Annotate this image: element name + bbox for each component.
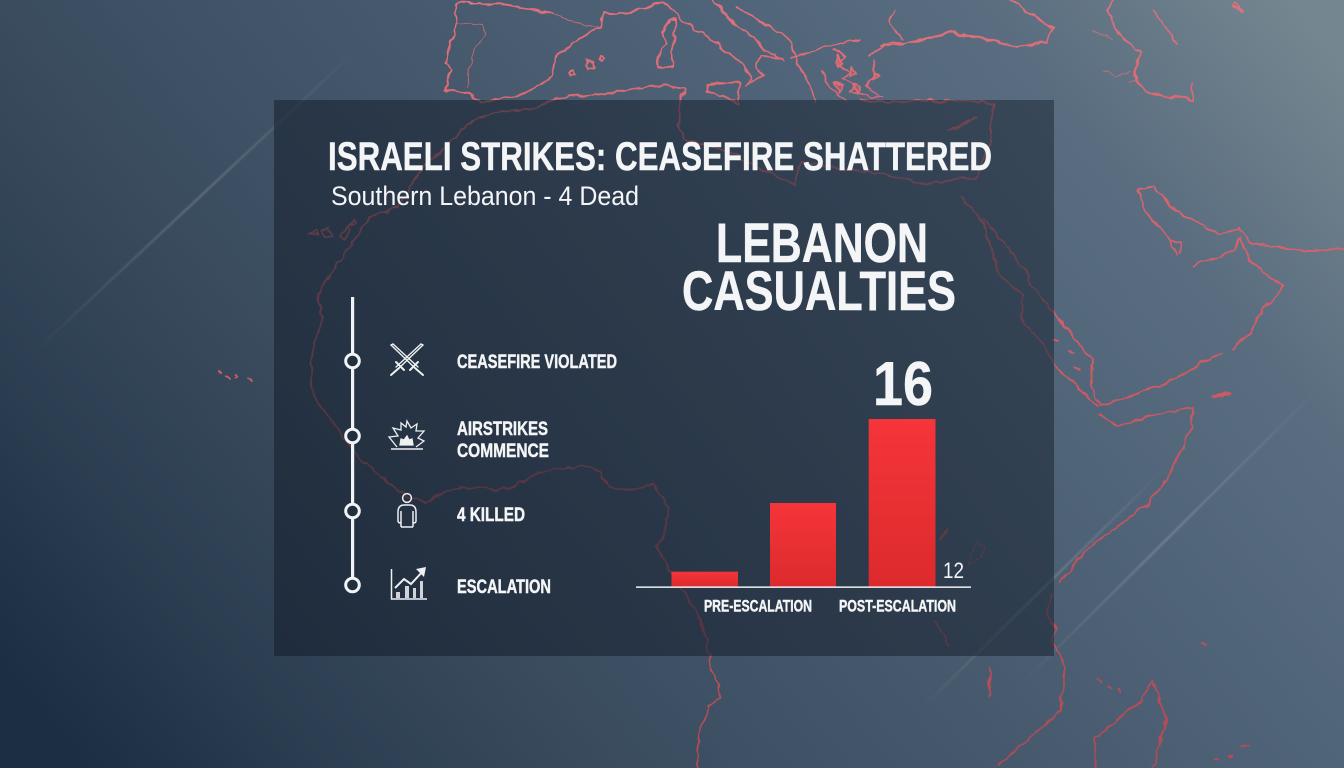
chart heading: CASUALTIES: [682, 259, 956, 322]
bar chart: [636, 350, 971, 616]
chart heading: LEBANON: [716, 211, 928, 274]
icon: person: [398, 494, 416, 527]
bar chart: POST-ESCALATION: [839, 596, 956, 616]
timeline labels: [457, 351, 617, 598]
bar chart: PRE-ESCALATION: [704, 596, 812, 616]
timeline labels: CEASEFIRE VIOLATED: [457, 351, 617, 373]
title: ISRAELI STRIKES: CEASEFIRE SHATTERED: [328, 135, 992, 179]
timeline labels: AIRSTRIKES: [457, 418, 548, 440]
icon: rising chart: [392, 567, 427, 599]
bar chart: 12: [943, 558, 964, 583]
bar chart: 16: [873, 350, 933, 419]
timeline: [346, 297, 359, 592]
subtitle: Southern Lebanon - 4 Dead: [331, 181, 639, 211]
timeline labels: COMMENCE: [457, 440, 549, 462]
panel: dark translucent card: [274, 100, 1054, 656]
timeline labels: 4 KILLED: [457, 504, 525, 526]
icon: explosion: [389, 421, 424, 449]
icon: crossed swords: [391, 344, 423, 375]
timeline labels: ESCALATION: [457, 576, 551, 598]
chart heading: [682, 211, 956, 322]
